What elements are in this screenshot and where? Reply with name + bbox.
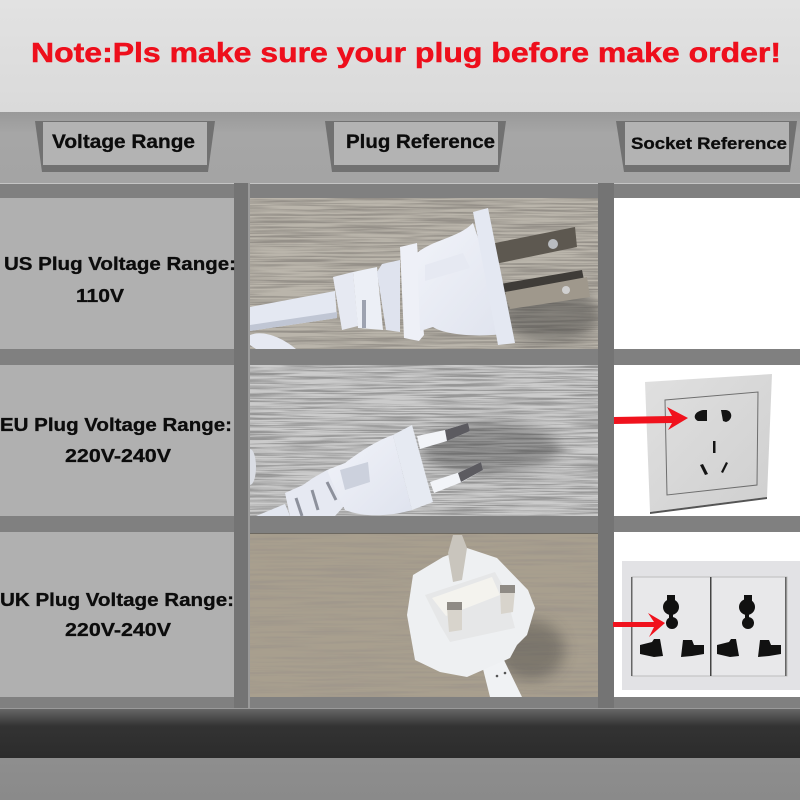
top note banner: [0, 0, 800, 112]
US plug prongs: [490, 227, 590, 309]
socket holes: [695, 410, 731, 475]
table grid background: [0, 183, 800, 708]
panel: US voltage: 110V: [76, 285, 125, 306]
panel: US socket (blank): [614, 198, 800, 349]
arrow: [613, 613, 665, 637]
photo: UK plug: [250, 532, 598, 697]
panel: EU voltage: [0, 365, 234, 516]
US plug strain relief: [333, 243, 424, 341]
tab: socket reference: [616, 121, 797, 172]
tab: voltage range: [35, 121, 215, 172]
panel: UK voltage: 220V-240V: [65, 619, 172, 640]
panel: UK socket: [613, 532, 800, 697]
socket holes right: [717, 595, 781, 657]
footer dark bar: [0, 708, 800, 758]
header band: [0, 112, 800, 183]
footer base: [0, 758, 800, 800]
panel: EU socket: [614, 365, 800, 516]
panel: EU voltage: EU Plug Voltage Range:: [0, 414, 232, 435]
tab: plug reference: Plug Reference: [346, 132, 495, 153]
photo: EU plug: [244, 365, 598, 516]
panel: EU voltage: 220V-240V: [65, 445, 172, 466]
tab: socket reference: Socket Reference: [631, 134, 787, 153]
title note: Note:Pls make sure your plug before make order!: [31, 37, 781, 68]
socket holes left: [640, 595, 704, 657]
tab: plug reference: [325, 121, 506, 172]
panel: US voltage: US Plug Voltage Range:: [4, 253, 236, 274]
photo: US plug: [250, 198, 600, 349]
panel: US voltage: [0, 198, 236, 349]
arrow: [614, 407, 688, 430]
panel: UK voltage: UK Plug Voltage Range:: [0, 589, 234, 610]
UK plug pins: [447, 535, 515, 632]
panel: UK voltage: [0, 532, 234, 697]
tab: voltage range: Voltage Range: [52, 132, 195, 153]
EU plug pins: [417, 423, 483, 493]
